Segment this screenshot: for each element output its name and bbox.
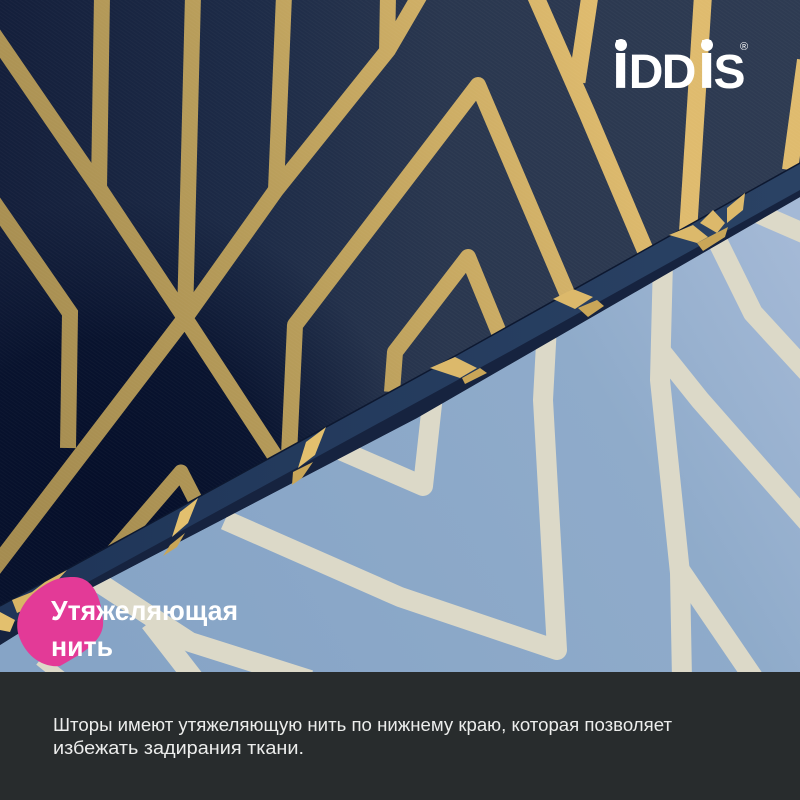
gold stripes on cord: [0, 193, 745, 632]
gold geometric lines: [0, 0, 800, 600]
description text: [53, 715, 672, 758]
description text: избежать задирания ткани.: [53, 738, 304, 758]
logo: iDDiS: [612, 28, 748, 102]
label: weighted thread: нить: [51, 631, 113, 662]
logo: iDDiS: S: [714, 46, 746, 99]
weighted cord along the hem: [0, 163, 800, 645]
logo: iDDiS: i: [612, 28, 630, 102]
cream geometric lines: [40, 212, 800, 680]
light curtain fabric reverse side with cream pattern: [0, 197, 800, 680]
label: weighted thread: [51, 595, 238, 662]
pink blob label background: [17, 577, 103, 666]
logo: iDDiS: ®: [740, 41, 748, 53]
description text: Шторы имеют утяжеляющую нить по нижнему краю, которая позволяет: [53, 715, 672, 735]
logo: iDDiS: DD: [629, 46, 696, 99]
label: weighted thread: Утяжеляющая: [51, 595, 238, 626]
logo: iDDiS: i: [698, 28, 716, 102]
description bar: [0, 672, 800, 800]
